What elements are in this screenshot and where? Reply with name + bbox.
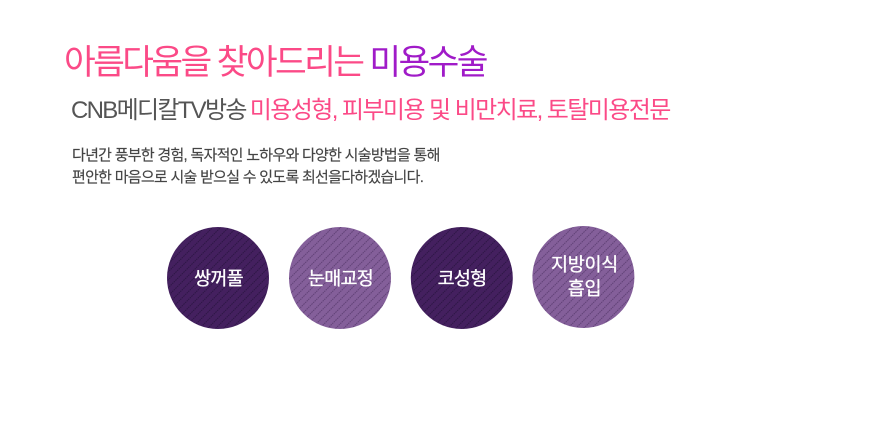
description text [72, 146, 440, 186]
circle: 코성형: 코성형 [438, 268, 486, 289]
circle: 눈매교정: 눈매교정 [308, 268, 373, 289]
circle: 코성형 [411, 227, 513, 329]
description text: 편안한 마음으로 시술 받으실 수 있도록 최선을다하겠습니다. [72, 168, 423, 186]
description text: 다년간 풍부한 경험, 독자적인 노하우와 다양한 시술방법을 통해 [72, 146, 440, 164]
circle: 지방이식 흡입 [532, 226, 634, 328]
title: 아름다움을 찾아드리는 미용수술 [64, 44, 486, 82]
circle: 눈매교정 [289, 227, 391, 329]
circle: 쌍꺼풀 [167, 227, 269, 329]
subtitle: CNB메디칼TV방송 미용성형, 피부미용 및 비만치료, 토탈미용전문 [71, 97, 670, 124]
circle: 지방이식 흡입: 흡입 [568, 278, 601, 299]
circle: 지방이식 흡입: 지방이식 [551, 254, 618, 275]
circle: 쌍꺼풀: 쌍꺼풀 [194, 268, 244, 289]
